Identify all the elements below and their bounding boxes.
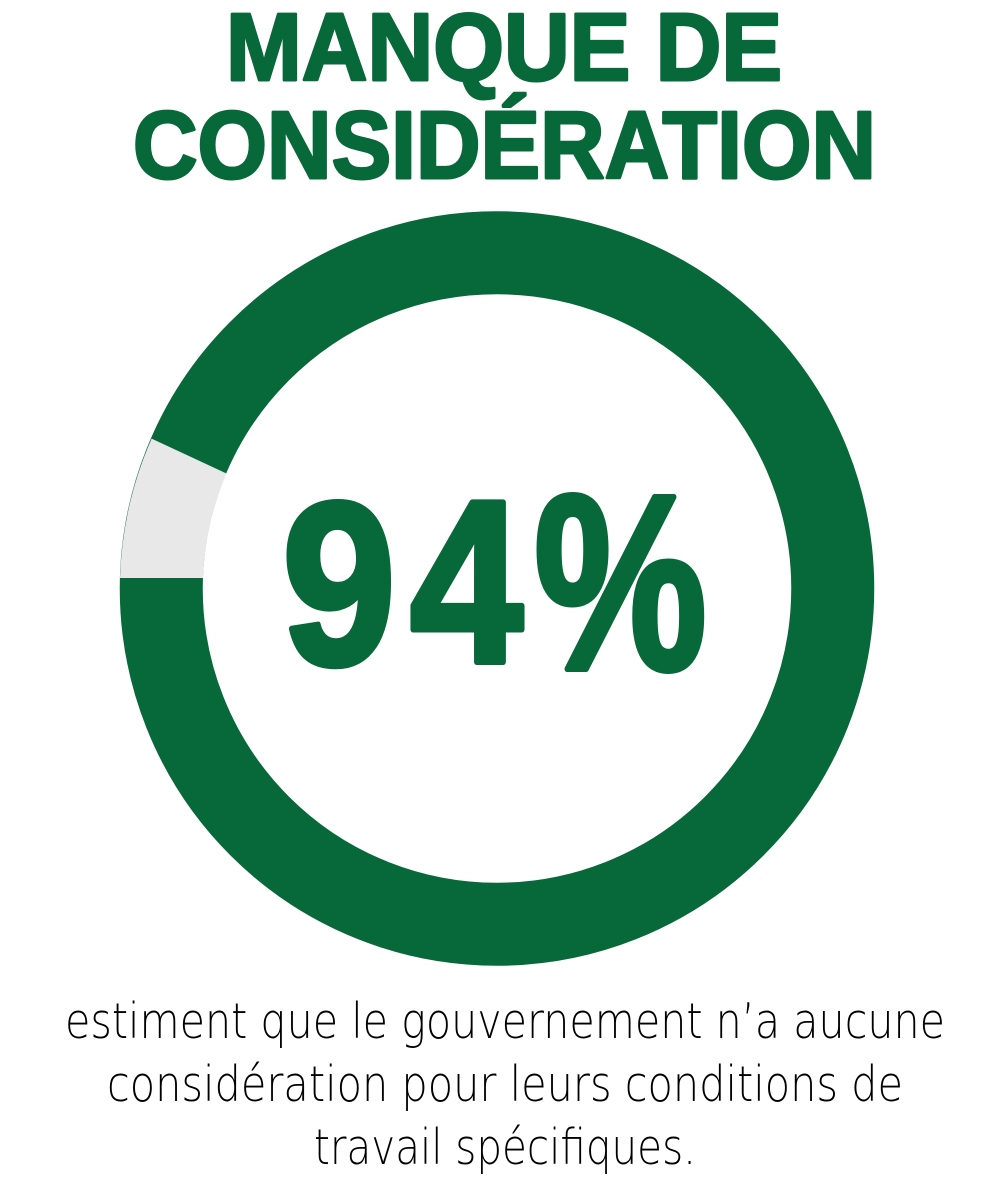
big percentage: %: [534, 443, 707, 722]
title: [133, 0, 876, 199]
description text: travail spécifiques.: [314, 1119, 696, 1176]
big percentage: 9: [282, 455, 396, 714]
title: CONSIDÉRATION: [133, 92, 876, 199]
big percentage: 4: [410, 453, 523, 712]
ring segment: 94% green: [161, 253, 833, 924]
description text: [65, 993, 945, 1176]
ring segment: 6% grey: [120, 439, 226, 578]
donut chart: 94%: [120, 253, 833, 924]
